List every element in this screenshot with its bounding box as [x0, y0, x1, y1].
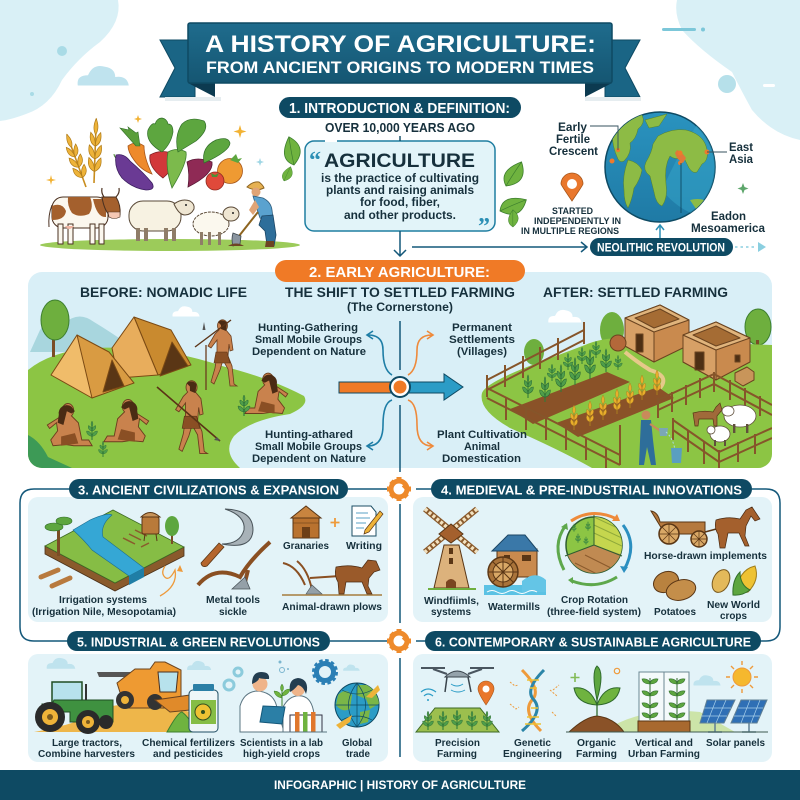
- farmer watering and animals: [639, 403, 756, 465]
- arrow: to neolithic revolution: [412, 242, 587, 252]
- icon: farmer with shovel: [228, 182, 276, 247]
- globe label: east asia: East: [729, 142, 753, 154]
- label: crop rotation: [547, 594, 641, 618]
- adobe houses: [610, 305, 754, 386]
- label: genetic: Genetic: [514, 737, 551, 749]
- footer: [0, 770, 800, 800]
- quote marks: “: [309, 148, 321, 174]
- icon: lamb: [193, 207, 239, 245]
- diagram labels: top right: Permanent: [452, 322, 512, 334]
- clouds: [47, 658, 360, 671]
- frame connectors: [20, 489, 780, 757]
- globe label: early fertile crescent: [549, 122, 618, 158]
- panel 4: medieval innovations: [413, 479, 772, 622]
- icon: sparkle: [738, 183, 748, 194]
- globe label: early fertile crescent: Early: [558, 122, 588, 134]
- people gathering and hunting: [47, 320, 288, 457]
- icon: wheat: [61, 118, 103, 189]
- label: metal tools: sickle: [219, 606, 247, 618]
- heading pill: 5. INDUSTRIAL & GREEN REVOLUTIONS: [77, 636, 320, 650]
- diagram labels: top right: (Villages): [457, 346, 507, 358]
- left scene: nomadic life: [28, 300, 305, 468]
- label: vertical: Vertical and: [635, 737, 693, 749]
- diagram labels: bottom left: Hunting-athared: [265, 429, 353, 441]
- started independently text: [521, 206, 621, 237]
- icon: crop rotation: [558, 513, 631, 585]
- icon: sheep: [129, 200, 194, 241]
- label: irrigation: Irrigation systems: [59, 594, 147, 606]
- label: scientists: Scientists in a lab: [240, 737, 323, 749]
- label: watermills: Watermills: [488, 601, 540, 613]
- globe: [605, 112, 722, 222]
- definition box: ”: [478, 214, 490, 240]
- label: potatoes: Potatoes: [654, 606, 696, 618]
- label: vertical: [628, 737, 700, 760]
- icon: dna: [510, 670, 559, 731]
- heading pill: 6. CONTEMPORARY & SUSTAINABLE AGRICULTURE: [435, 636, 751, 650]
- illustration: irrigation: [41, 510, 184, 596]
- neolithic revolution pill: NEOLITHIC REVOLUTION: [597, 242, 725, 254]
- diagram labels: bottom left: [252, 429, 366, 465]
- label: metal tools: [206, 594, 260, 618]
- definition text: [321, 173, 479, 222]
- globe label: mesoamerica: Eadon: [711, 211, 746, 223]
- label: organic: Organic: [577, 737, 616, 749]
- arrow: up to globe: [656, 225, 664, 238]
- column headings: [80, 285, 728, 300]
- icon: windmill: [425, 509, 477, 589]
- label: global trade: [342, 737, 372, 760]
- footer: INFOGRAPHIC | HISTORY OF AGRICULTURE: [274, 780, 526, 792]
- started independently text: IN MULTIPLE REGIONS: [521, 226, 619, 237]
- panel 3: ancient civilizations: [28, 479, 388, 622]
- label: fertilizers: [142, 737, 235, 760]
- labels: granaries, writing: [283, 540, 382, 552]
- label: genetic: Engineering: [503, 748, 562, 760]
- definition text: plants and raising animals: [326, 185, 474, 197]
- shift diagram: [339, 321, 463, 472]
- diagram labels: top right: [449, 322, 515, 358]
- label: genetic: [503, 737, 562, 760]
- blue arrow: [409, 374, 463, 400]
- globe label: east asia: [707, 142, 754, 166]
- label: fertilizers: Chemical fertilizers: [142, 737, 235, 749]
- ground: [40, 239, 300, 251]
- icon: corn: [709, 566, 756, 595]
- panel 6: contemporary and sustainable: [413, 631, 772, 762]
- icon: potatoes: [650, 567, 698, 604]
- definition text: is the practice of cultivating: [321, 173, 479, 185]
- plus sign: [330, 518, 340, 527]
- labels: granaries, writing: Writing: [346, 540, 382, 552]
- label: windmills: systems: [431, 606, 471, 618]
- diagram labels: top left: Small Mobile Groups: [255, 334, 362, 346]
- panel: early agriculture: [28, 272, 772, 472]
- diagram labels: bottom left: Small Mobile Groups: [255, 441, 362, 453]
- diagram labels: bottom right: [437, 429, 527, 465]
- label: organic: [576, 737, 617, 760]
- icon: horse-drawn wagon: [651, 507, 760, 548]
- globe label: east asia: Asia: [729, 154, 754, 166]
- column headings: THE SHIFT TO SETTLED FARMING: [285, 285, 515, 300]
- diagram labels: top left: Hunting-Gathering: [258, 322, 358, 334]
- diagram labels: bottom right: Animal: [464, 441, 500, 453]
- label: new world crops: New World: [707, 599, 760, 611]
- wheat field: [34, 704, 190, 732]
- illustration: crops and livestock: [40, 115, 300, 251]
- panel 5: industrial and green revolutions: [28, 631, 388, 762]
- title heading: A HISTORY OF AGRICULTURE:: [205, 31, 596, 58]
- icon: combine harvester: [97, 662, 190, 712]
- heading: AGRICULTURE: [324, 151, 475, 172]
- label: metal tools: Metal tools: [206, 594, 260, 606]
- diagram labels: bottom right: Plant Cultivation: [437, 429, 527, 441]
- label: new world crops: [707, 599, 760, 622]
- section 2 heading pill: 2. EARLY AGRICULTURE:: [309, 264, 490, 281]
- icon: fertilizer: [167, 684, 218, 732]
- dotted arrow: [735, 242, 766, 252]
- heading pill: [431, 479, 752, 499]
- label: irrigation: (Irrigation Nile, Mesopotamia): [32, 606, 176, 618]
- icon: scientists: [240, 660, 327, 732]
- icon: gears: [387, 477, 411, 653]
- icon: organic plant: [569, 666, 735, 732]
- label: tractors: Combine harvesters: [38, 748, 135, 760]
- diagram labels: bottom left: Dependent on Nature: [252, 453, 366, 465]
- icon: solar panels: [566, 700, 768, 732]
- icon: sickle: [201, 509, 253, 567]
- icon: sun and cloud: [693, 661, 758, 693]
- title banner: [160, 23, 641, 101]
- background blobs: [0, 0, 800, 140]
- heading pill: 4. MEDIEVAL & PRE-INDUSTRIAL INNOVATIONS: [441, 484, 742, 498]
- center node: [390, 377, 410, 397]
- heading pill: 3. ANCIENT CIVILIZATIONS & EXPANSION: [78, 484, 339, 498]
- label: solar: Solar panels: [706, 737, 765, 749]
- neolithic revolution pill: [590, 238, 733, 256]
- right scene: settled farming: [482, 305, 772, 472]
- label: precision: Precision: [435, 737, 480, 749]
- label: tractors: Large tractors,: [52, 737, 122, 749]
- label: precision: [435, 737, 480, 760]
- label: irrigation: [32, 594, 176, 618]
- diagram labels: top right: Settlements: [449, 334, 515, 346]
- label: fertilizers: and pesticides: [153, 748, 223, 760]
- label: crop rotation: Crop Rotation: [561, 594, 628, 606]
- definition box: [305, 136, 495, 240]
- curved arrows: [367, 331, 392, 375]
- orange bar: [339, 382, 391, 393]
- diagram labels: top left: [252, 322, 366, 358]
- icon: vegetables: [114, 118, 242, 190]
- diagram labels: top left: Dependent on Nature: [252, 346, 366, 358]
- globe label: early fertile crescent: Crescent: [549, 146, 598, 158]
- icon: tractor: [35, 682, 113, 734]
- globe label: mesoamerica: Mesoamerica: [691, 223, 766, 235]
- icon: lab gears: [224, 660, 336, 690]
- trees: [41, 300, 69, 357]
- label: tractors: [38, 737, 135, 760]
- label: horse-drawn implements: Horse-drawn implements: [644, 550, 767, 562]
- icons: leaves around definition: [277, 135, 529, 228]
- heading pill: [69, 479, 348, 499]
- started independently text: STARTED: [552, 206, 593, 217]
- crop beds: [510, 341, 674, 437]
- decorative sparkles: [46, 115, 246, 185]
- label: precision: Farming: [437, 748, 477, 760]
- label: global trade: trade: [346, 748, 370, 760]
- label: scientists: [240, 737, 323, 760]
- arrow: definition down to early agriculture: [394, 231, 406, 256]
- icon: drone: [416, 668, 499, 732]
- column headings: BEFORE: NOMADIC LIFE: [80, 285, 247, 300]
- label: organic: Farming: [576, 748, 617, 760]
- label: crop rotation: (three-field system): [547, 606, 641, 618]
- section 2 heading pill: [275, 260, 525, 282]
- icon: vertical farm: [638, 672, 690, 732]
- subtitle: FROM ANCIENT ORIGINS TO MODERN TIMES: [206, 59, 594, 77]
- timeline text: OVER 10,000 YEARS AGO: [325, 120, 475, 135]
- label: new world crops: crops: [720, 610, 747, 622]
- label: plows: Animal-drawn plows: [282, 601, 382, 613]
- icon: cow: [49, 188, 120, 244]
- icon: granary: [291, 506, 321, 538]
- definition text: for food, fiber,: [360, 197, 440, 209]
- labels: granaries, writing: Granaries: [283, 540, 329, 552]
- label: scientists: high-yield crops: [243, 748, 320, 760]
- label: vertical: Urban Farming: [628, 748, 700, 760]
- label: global trade: Global: [342, 737, 372, 749]
- column headings: AFTER: SETTLED FARMING: [543, 285, 728, 300]
- heading pill: [67, 631, 330, 651]
- icon: plow: [198, 542, 270, 589]
- globe label: early fertile crescent: Fertile: [556, 134, 590, 146]
- fences: [487, 322, 772, 472]
- section 1 heading pill: 1. INTRODUCTION & DEFINITION:: [289, 101, 510, 117]
- definition text: and other products.: [344, 210, 456, 222]
- icon: document: [352, 506, 383, 536]
- label: windmills: [424, 595, 479, 618]
- diagram labels: bottom right: Domestication: [442, 453, 521, 465]
- heading pill: [425, 631, 761, 651]
- icon: map pin: [561, 173, 583, 201]
- label: windmills: Windfiimls,: [424, 595, 479, 607]
- icon: global trade: [335, 683, 380, 729]
- cornerstone subtitle: (The Cornerstone): [347, 302, 453, 314]
- started independently text: INDEPENDENTLY IN: [534, 216, 621, 227]
- tents: [51, 317, 191, 398]
- globe label: mesoamerica: [691, 211, 766, 235]
- icon: animal-drawn plow: [282, 560, 382, 595]
- icon: watermill: [484, 535, 546, 595]
